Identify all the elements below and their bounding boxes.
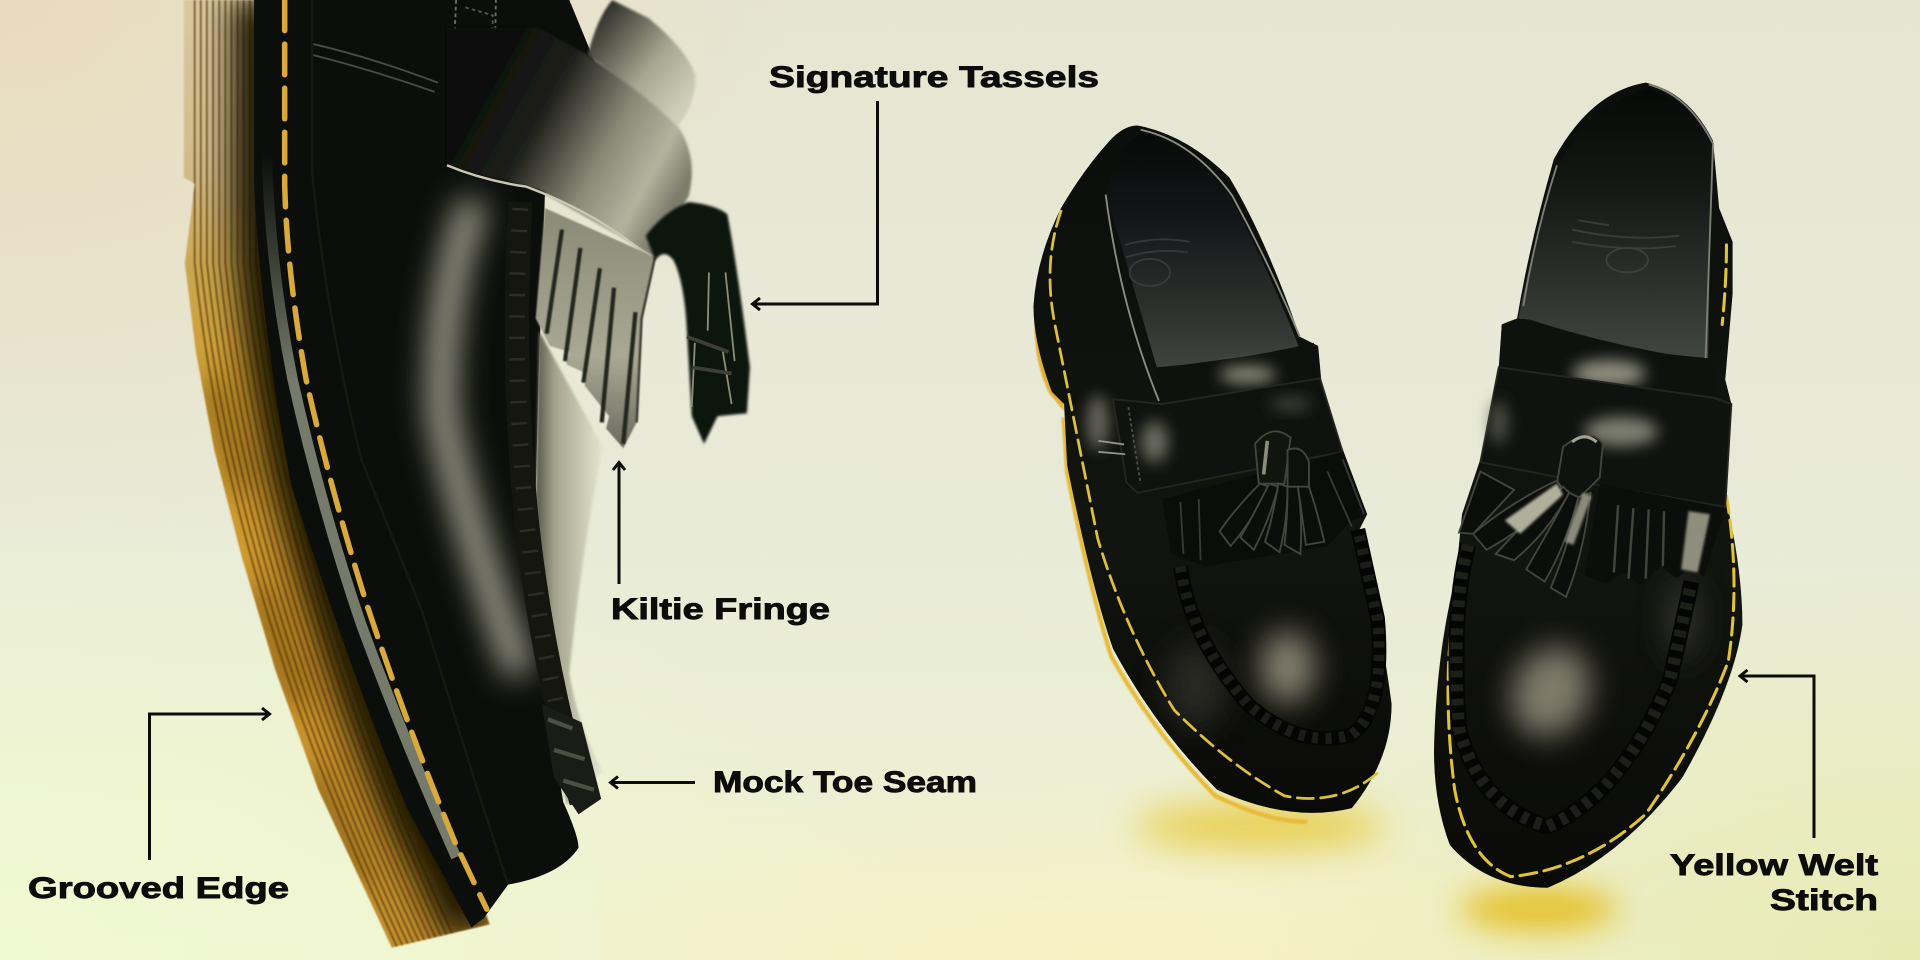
- strap: [447, 28, 692, 257]
- strap roll A: [1156, 343, 1318, 405]
- strap A: [1113, 378, 1343, 493]
- side panel seam A: [1098, 441, 1125, 454]
- tassels A: [1220, 431, 1324, 554]
- black upper and welt: [254, 0, 612, 927]
- pale highlight band on vamp: [534, 331, 603, 805]
- insole logo B: [1572, 220, 1679, 272]
- right sheen B: [1666, 575, 1698, 661]
- collar rim B: [1523, 84, 1713, 358]
- insole B: [1518, 89, 1712, 358]
- side highlight: [1087, 395, 1109, 450]
- callout: Yellow Welt Stitch: Yellow Welt: [1670, 849, 1878, 882]
- tassel: [646, 202, 750, 444]
- left shoe: close-up side view: [171, 0, 750, 955]
- callout: Signature Tassels: [752, 61, 1099, 310]
- callout: Yellow Welt Stitch: Stitch: [1770, 884, 1878, 917]
- toe highlight: [1259, 631, 1316, 704]
- moc toe seam B: [1456, 545, 1692, 826]
- yellow floor glow A: [1134, 803, 1385, 850]
- callout: Yellow Welt Stitch: [1670, 670, 1878, 917]
- yellow stitching: [285, 0, 487, 909]
- kiltie fringe: [536, 208, 655, 448]
- callout: Mock Toe Seam: [610, 766, 977, 799]
- fringe B: [1584, 484, 1725, 585]
- strap gloss B: [1584, 417, 1658, 446]
- grooved sole: [183, 0, 490, 948]
- leather highlight: [442, 202, 520, 673]
- loafer A (middle): [1033, 126, 1392, 822]
- strap gloss A: [1141, 421, 1168, 463]
- shoe body B: [1434, 83, 1742, 888]
- strap roll gloss B: [1572, 360, 1646, 387]
- fringe A: [1162, 452, 1367, 566]
- strap gloss right A: [1270, 398, 1311, 410]
- toe highlight B: [1497, 634, 1605, 750]
- right pair of loafers: [1033, 83, 1742, 931]
- loafer B (right): [1434, 83, 1742, 888]
- toe outer sheen: [1165, 643, 1226, 729]
- callout: Signature Tassels: Signature Tassels: [769, 61, 1099, 94]
- strap roll gloss A: [1220, 366, 1276, 383]
- yellow sole edge: [1035, 300, 1307, 822]
- welt edge highlight: [267, 153, 456, 857]
- callout: Kiltie Fringe: [611, 462, 830, 626]
- yellow floor glow B: [1459, 887, 1618, 931]
- strap gloss edge: [447, 165, 649, 257]
- tassels B: [1459, 435, 1603, 597]
- strap roll: [588, 0, 695, 129]
- yellow stitching A: [1050, 211, 1379, 798]
- callout: Kiltie Fringe: Kiltie Fringe: [611, 593, 830, 626]
- strap gloss left B: [1490, 400, 1507, 444]
- callout: Mock Toe Seam: Mock Toe Seam: [713, 766, 977, 799]
- callout: Grooved Edge: [28, 708, 289, 905]
- yellow stitching B: [1448, 245, 1734, 877]
- mock toe seam: [517, 202, 601, 814]
- collar rim A: [1106, 130, 1300, 401]
- moc toe seam A: [1180, 530, 1379, 738]
- shoe body: [1033, 126, 1392, 813]
- strap B: [1480, 367, 1731, 507]
- callout: Grooved Edge: Grooved Edge: [28, 872, 289, 905]
- insole A: [1107, 133, 1300, 369]
- stitched tab: [450, 0, 496, 162]
- upper seam line: [313, 44, 438, 92]
- strap roll B: [1499, 319, 1716, 398]
- welt boundary: [312, 0, 508, 885]
- insole logo A: [1125, 239, 1190, 286]
- strap stitch A: [1128, 407, 1141, 484]
